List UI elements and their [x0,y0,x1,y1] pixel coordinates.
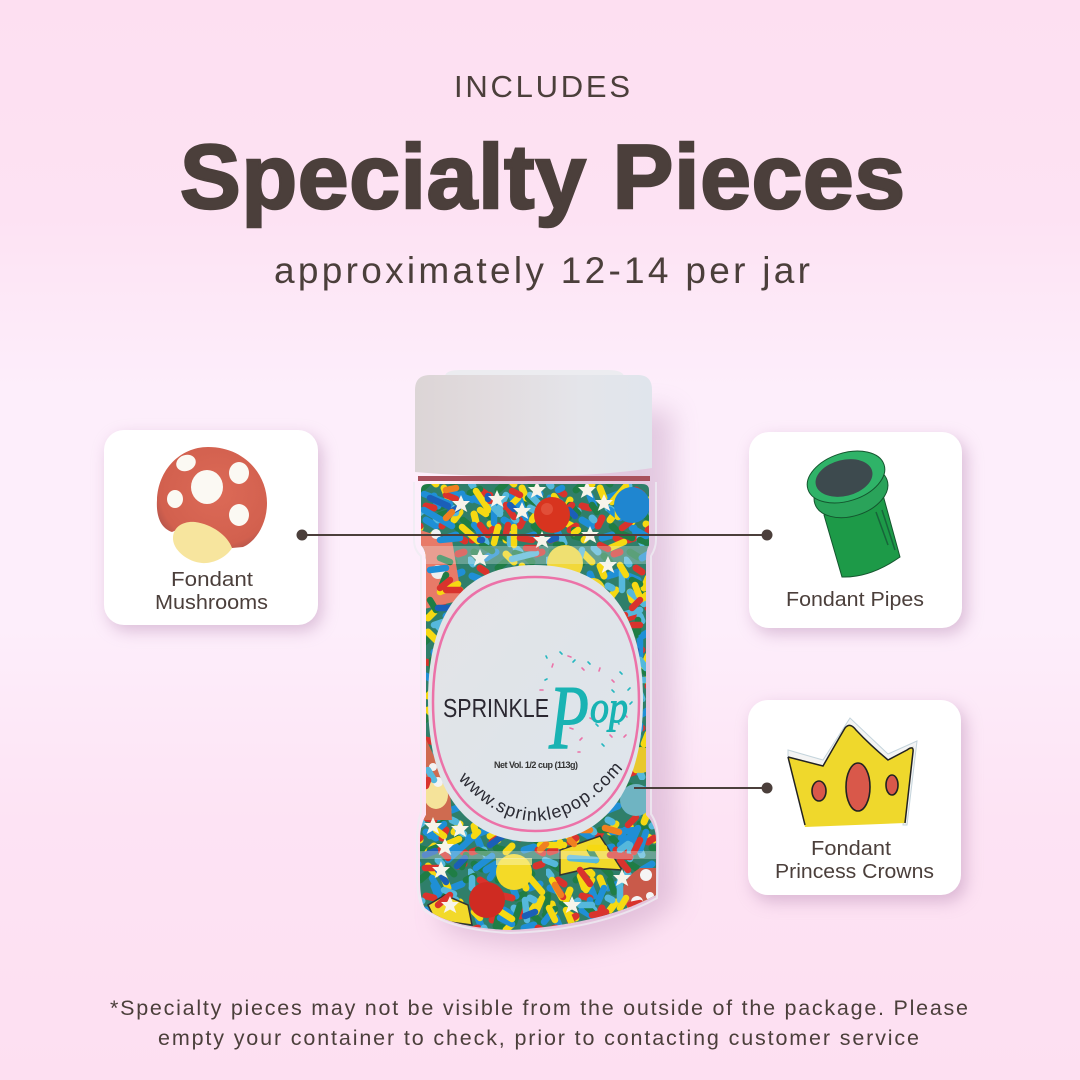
eyebrow heading: INCLUDES [454,69,630,104]
website url: www.sprinklepop.com [460,764,622,821]
card label: Fondant [171,569,253,591]
glass outline [414,482,658,933]
card: mushrooms [104,430,322,631]
candy balls [469,487,654,918]
card label [775,838,934,883]
footnote: *Specialty pieces may not be visible from the outside of the package. Please [110,996,968,1020]
title: Specialty Pieces [180,127,905,228]
card label: Fondant [811,838,891,860]
subtitle: approximately 12-14 per jar [274,250,810,291]
jar label [428,565,643,842]
card: pipes [749,432,967,634]
connector: crowns to jar [634,782,772,794]
jar lid [415,370,652,481]
card label [155,569,268,614]
logo wordmark pop: op: op [590,683,628,732]
icon: mushroom [157,447,267,563]
logo wordmark pop: P: P [548,666,589,768]
jar contents [415,480,660,935]
card: crowns [748,700,966,902]
label body [428,565,643,842]
label pink ring [433,577,639,831]
jar shadow [440,410,676,945]
white star sprinkles [424,481,631,913]
net volume: Net Vol. 1/2 cup (113g) [494,760,578,770]
logo wordmark sprinkle: SPRINKLE [443,693,549,723]
glass highlights [415,546,660,564]
icon: pipe [801,442,900,577]
specialty pieces inside jar [420,529,656,925]
card label: Princess Crowns [775,861,934,883]
footnote [110,996,968,1050]
card label: Mushrooms [155,592,268,614]
connector: mushrooms and pipes to jar [296,530,772,540]
icon: crown [788,718,917,827]
logo confetti [540,652,632,752]
jar [413,370,684,953]
sprinkles [424,486,648,926]
footnote: empty your container to check, prior to contacting customer service [158,1026,919,1050]
card label: Fondant Pipes [786,589,924,611]
